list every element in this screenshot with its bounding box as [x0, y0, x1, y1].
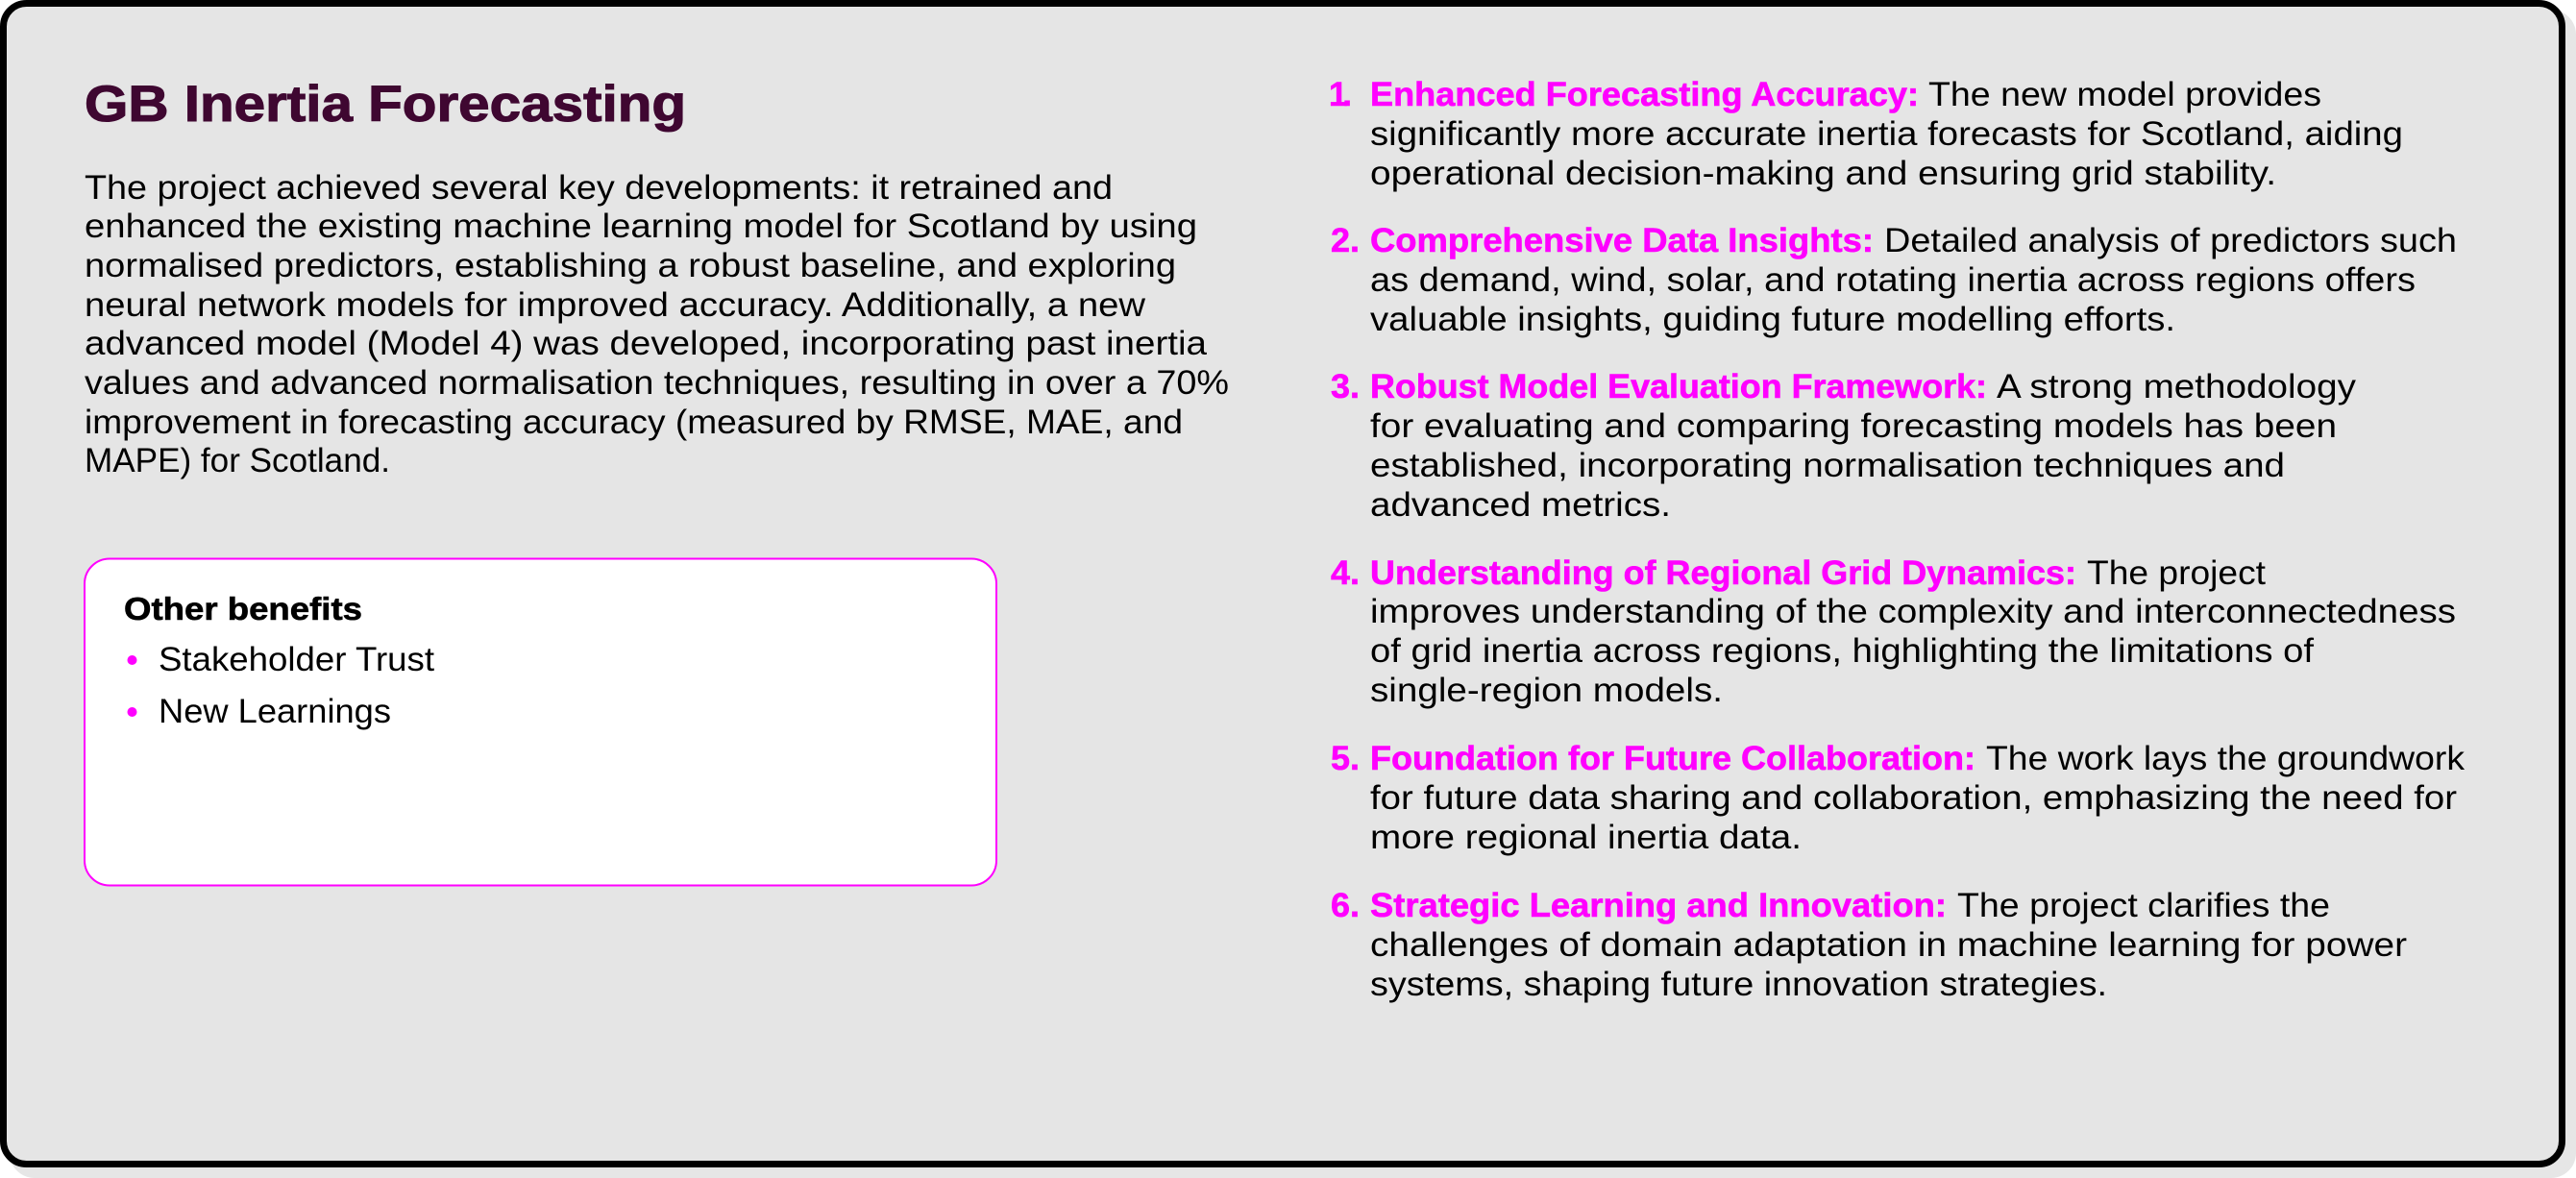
- intro paragraph: values and advanced normalisation techniques, resulting in over a 70%: [85, 364, 1229, 402]
- list item 4: understanding of regional grid dynamics: single-region models.: [1370, 672, 1723, 709]
- list item 3: robust model evaluation framework: [1331, 368, 2357, 524]
- list item 2: comprehensive data insights: Comprehensive Data Insights:: [1370, 222, 1874, 259]
- intro paragraph: normalised predictors, establishing a robust baseline, and exploring: [85, 247, 1176, 284]
- list item 4: understanding of regional grid dynamics: 4.: [1331, 554, 1360, 592]
- list item 6: strategic learning and innovation: systems, shaping future innovation strategies.: [1370, 966, 2107, 1003]
- intro paragraph: improvement in forecasting accuracy (measured by RMSE, MAE, and: [85, 404, 1183, 441]
- intro paragraph: [85, 169, 1229, 479]
- list item 3: robust model evaluation framework: established, incorporating normalisation techniques and: [1370, 447, 2285, 484]
- list item 5: foundation for future collaboration: [1331, 740, 2466, 856]
- list item 1: enhanced forecasting accuracy: Enhanced Forecasting Accuracy:: [1370, 76, 1919, 113]
- list item 6: strategic learning and innovation: The project clarifies the: [1957, 887, 2330, 924]
- list item 5: foundation for future collaboration: Foundation for Future Collaboration:: [1370, 740, 1975, 777]
- list item 6: strategic learning and innovation: Strategic Learning and Innovation:: [1370, 887, 1947, 924]
- list item 3: robust model evaluation framework: for evaluating and comparing forecasting models has been: [1370, 407, 2337, 445]
- list item 1: enhanced forecasting accuracy: The new model provides: [1928, 76, 2321, 113]
- list item 4: understanding of regional grid dynamics: [1331, 554, 2456, 709]
- list item 3: robust model evaluation framework: Robust Model Evaluation Framework:: [1370, 368, 1987, 405]
- list item 6: strategic learning and innovation: [1331, 887, 2407, 1003]
- list item 3: robust model evaluation framework: 3.: [1331, 368, 1360, 405]
- list item 5: foundation for future collaboration: more regional inertia data.: [1370, 819, 1802, 856]
- list item 4: understanding of regional grid dynamics: of grid inertia across regions, highlighting the limitations of: [1370, 632, 2314, 670]
- title: GB Inertia Forecasting: [85, 76, 686, 133]
- list item 5: foundation for future collaboration: The work lays the groundwork: [1986, 740, 2466, 777]
- list item 1: enhanced forecasting accuracy: [1329, 76, 2403, 192]
- list item 4: understanding of regional grid dynamics: The project: [2087, 554, 2266, 592]
- list item 5: foundation for future collaboration: for future data sharing and collaboration, emphasizing the need for: [1370, 779, 2457, 817]
- list item 1: enhanced forecasting accuracy: significantly more accurate inertia forecasts for Scotland, aiding: [1370, 115, 2403, 153]
- panel: other benefits: [85, 559, 996, 886]
- list item 5: foundation for future collaboration: 5.: [1331, 740, 1360, 777]
- benefit: stakeholder trust: Stakeholder Trust: [159, 641, 434, 678]
- list item 6: strategic learning and innovation: challenges of domain adaptation in machine learning for power: [1370, 926, 2407, 964]
- list item 1: enhanced forecasting accuracy: operational decision-making and ensuring grid stability.: [1370, 155, 2276, 192]
- list item 6: strategic learning and innovation: 6.: [1331, 887, 1360, 924]
- list item 2: comprehensive data insights: valuable insights, guiding future modelling efforts.: [1370, 301, 2175, 338]
- list item 1: enhanced forecasting accuracy: 1.: [1329, 76, 1352, 113]
- list item 3: robust model evaluation framework: A strong methodology: [1997, 368, 2357, 405]
- list item 2: comprehensive data insights: 2.: [1331, 222, 1360, 259]
- other benefits heading: Other benefits: [124, 591, 362, 626]
- intro paragraph: MAPE) for Scotland.: [85, 442, 390, 479]
- list item 2: comprehensive data insights: Detailed analysis of predictors such: [1884, 222, 2457, 259]
- benefit: new learnings: New Learnings: [159, 693, 391, 730]
- list item 4: understanding of regional grid dynamics: Understanding of Regional Grid Dynamics:: [1370, 554, 2076, 592]
- list item 2: comprehensive data insights: [1331, 222, 2457, 338]
- list item 2: comprehensive data insights: as demand, wind, solar, and rotating inertia across regions offers: [1370, 261, 2416, 299]
- list item 4: understanding of regional grid dynamics: improves understanding of the complexity and interconnectedness: [1370, 593, 2456, 630]
- intro paragraph: The project achieved several key developments: it retrained and: [85, 169, 1113, 207]
- intro paragraph: enhanced the existing machine learning model for Scotland by using: [85, 208, 1197, 245]
- intro paragraph: advanced model (Model 4) was developed, incorporating past inertia: [85, 325, 1208, 362]
- intro paragraph: neural network models for improved accuracy. Additionally, a new: [85, 286, 1146, 324]
- list item 3: robust model evaluation framework: advanced metrics.: [1370, 486, 1671, 524]
